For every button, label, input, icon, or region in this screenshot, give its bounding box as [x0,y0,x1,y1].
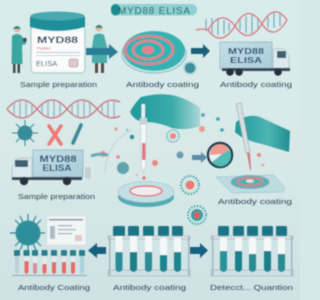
virus lower centre [181,176,199,194]
faint sphere [105,130,132,172]
caption: antibody coating right: Antibody coating [220,80,292,89]
dish centre [118,182,174,207]
red tubes [12,250,87,276]
viruses middle [152,113,224,166]
scattered cells centre [91,127,146,180]
person left [12,26,26,73]
dna top right [196,12,287,38]
truck middle: ELISA [42,163,72,173]
truck middle [12,150,92,185]
glove and pipette centre [130,94,200,173]
arrow 1 [86,44,118,59]
arrow 5 [190,243,208,258]
dots right [257,153,264,166]
rack middle [108,226,190,276]
truck top: MYD88 [228,46,264,56]
teal slash [73,125,81,143]
jar [30,12,85,73]
arrow 3 [192,152,207,163]
truck middle: MYD88 [40,154,76,164]
arrow 4 [88,243,106,258]
virus left [12,120,38,146]
virus top of bottom row [188,206,206,224]
jar: ELISA [36,59,57,68]
truck top [220,42,290,76]
petri dish [122,31,196,74]
rack right [211,226,293,276]
title: MYD88 ELISA [118,6,190,17]
caption: antibody coating centre: Antibody coating [126,80,199,89]
protocol sheet [47,216,86,245]
caption: antibody coating bottom left: Antibody Coating [18,283,90,292]
glove and pipette right [235,103,290,170]
caption: sample preparation top: Sample preparation [20,80,97,89]
magnifier [208,143,232,167]
slide [216,175,285,193]
jar: MYD88 [37,35,78,46]
caption: antibody coating lower right: Antibody coating [218,197,292,206]
person right [92,24,107,73]
jar: Peptides [37,46,51,50]
red X [49,126,61,144]
caption: antibody coating bottom middle: Antibody coating [113,283,186,292]
truck top: ELISA [230,55,262,65]
caption: detection quantification: Detecct... Quantion [210,283,293,292]
virus bottom left [10,214,45,252]
caption: sample preparation middle: Sample preparation [18,192,95,201]
arrow 2 [191,44,210,58]
dna middle left [7,100,120,118]
